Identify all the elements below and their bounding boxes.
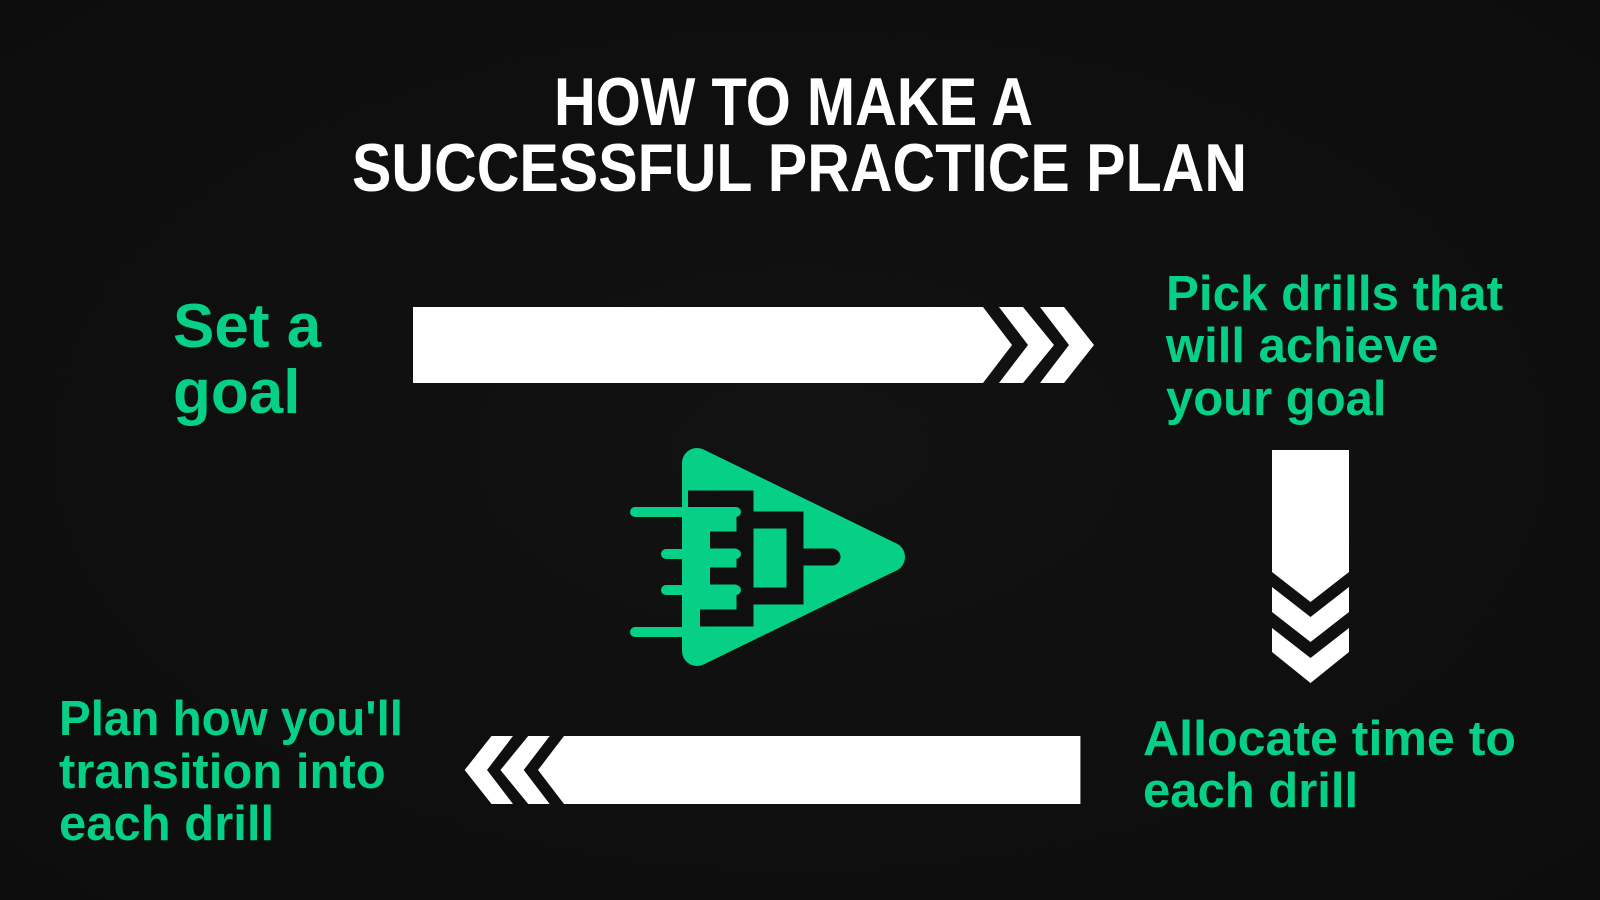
step: set a goal	[173, 292, 322, 427]
step: pick drills: Pick drills that	[1166, 267, 1503, 321]
arrow: left	[465, 736, 1080, 804]
step: plan transitions: each drill	[59, 797, 274, 851]
arrow: right	[413, 307, 1094, 383]
title	[352, 64, 1247, 206]
step: plan transitions	[59, 692, 403, 851]
logo	[635, 463, 890, 651]
step: allocate time: Allocate time to	[1143, 712, 1516, 766]
step: set a goal: Set a	[173, 292, 322, 361]
step: allocate time	[1143, 712, 1516, 818]
arrow: down	[1272, 450, 1349, 683]
title: SUCCESSFUL PRACTICE PLAN	[352, 130, 1247, 206]
step: set a goal: goal	[173, 358, 300, 427]
step: pick drills	[1165, 267, 1503, 426]
step: plan transitions: transition into	[59, 745, 386, 799]
step: pick drills: your goal	[1166, 372, 1387, 426]
title: HOW TO MAKE A	[554, 64, 1033, 140]
step: pick drills: will achieve	[1165, 319, 1438, 373]
step: allocate time: each drill	[1143, 764, 1358, 818]
step: plan transitions: Plan how you'll	[59, 692, 403, 746]
